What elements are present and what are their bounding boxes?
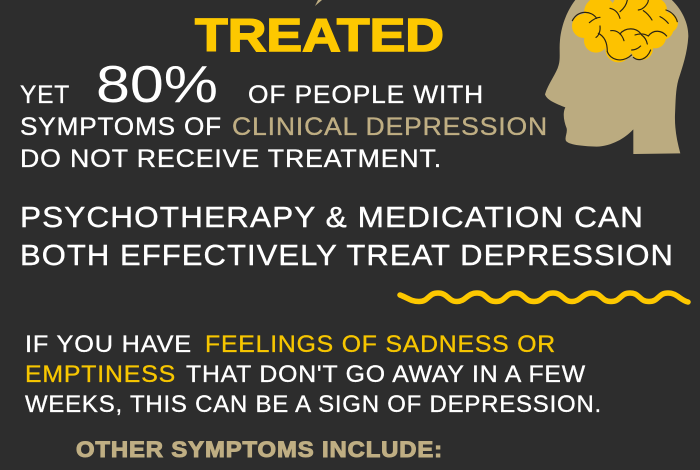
line: if you have: IF YOU HAVE: [25, 331, 192, 358]
line: do not receive treatment: DO NOT RECEIVE TREATMENT.: [20, 145, 442, 173]
symptom paragraph: [25, 331, 602, 418]
cropped comma from the previous heading line: [315, 0, 322, 6]
line: that don't go away: THAT DON'T GO AWAY IN A FEW: [186, 361, 586, 388]
subheading: other symptoms: OTHER SYMPTOMS INCLUDE:: [76, 437, 443, 462]
brain: [572, 0, 678, 62]
heading: treated: TREATED: [195, 9, 444, 61]
highlighted phrase: feelings of sadness or: FEELINGS OF SADNESS OR: [205, 331, 556, 358]
line: of people with: OF PEOPLE WITH: [248, 81, 484, 109]
highlighted word: emptiness: EMPTINESS: [25, 361, 176, 388]
treatment statement: [20, 202, 674, 272]
head silhouette: [545, 0, 688, 154]
line: psychotherapy and medication: PSYCHOTHERAPY & MEDICATION CAN: [20, 202, 644, 234]
icon: head with brain: [545, 0, 688, 154]
line: both effectively treat: BOTH EFFECTIVELY TREAT DEPRESSION: [20, 240, 674, 272]
line: sign of depression: WEEKS, THIS CAN BE A SIGN OF DEPRESSION.: [25, 391, 602, 418]
wavy divider: [400, 293, 688, 302]
highlighted term: clinical depression: CLINICAL DEPRESSION: [232, 113, 548, 141]
statistic text block: [20, 56, 548, 173]
line: symptoms of: SYMPTOMS OF: [20, 113, 222, 141]
big number: 80%: 80%: [96, 56, 218, 114]
line: yet: YET: [20, 81, 70, 109]
